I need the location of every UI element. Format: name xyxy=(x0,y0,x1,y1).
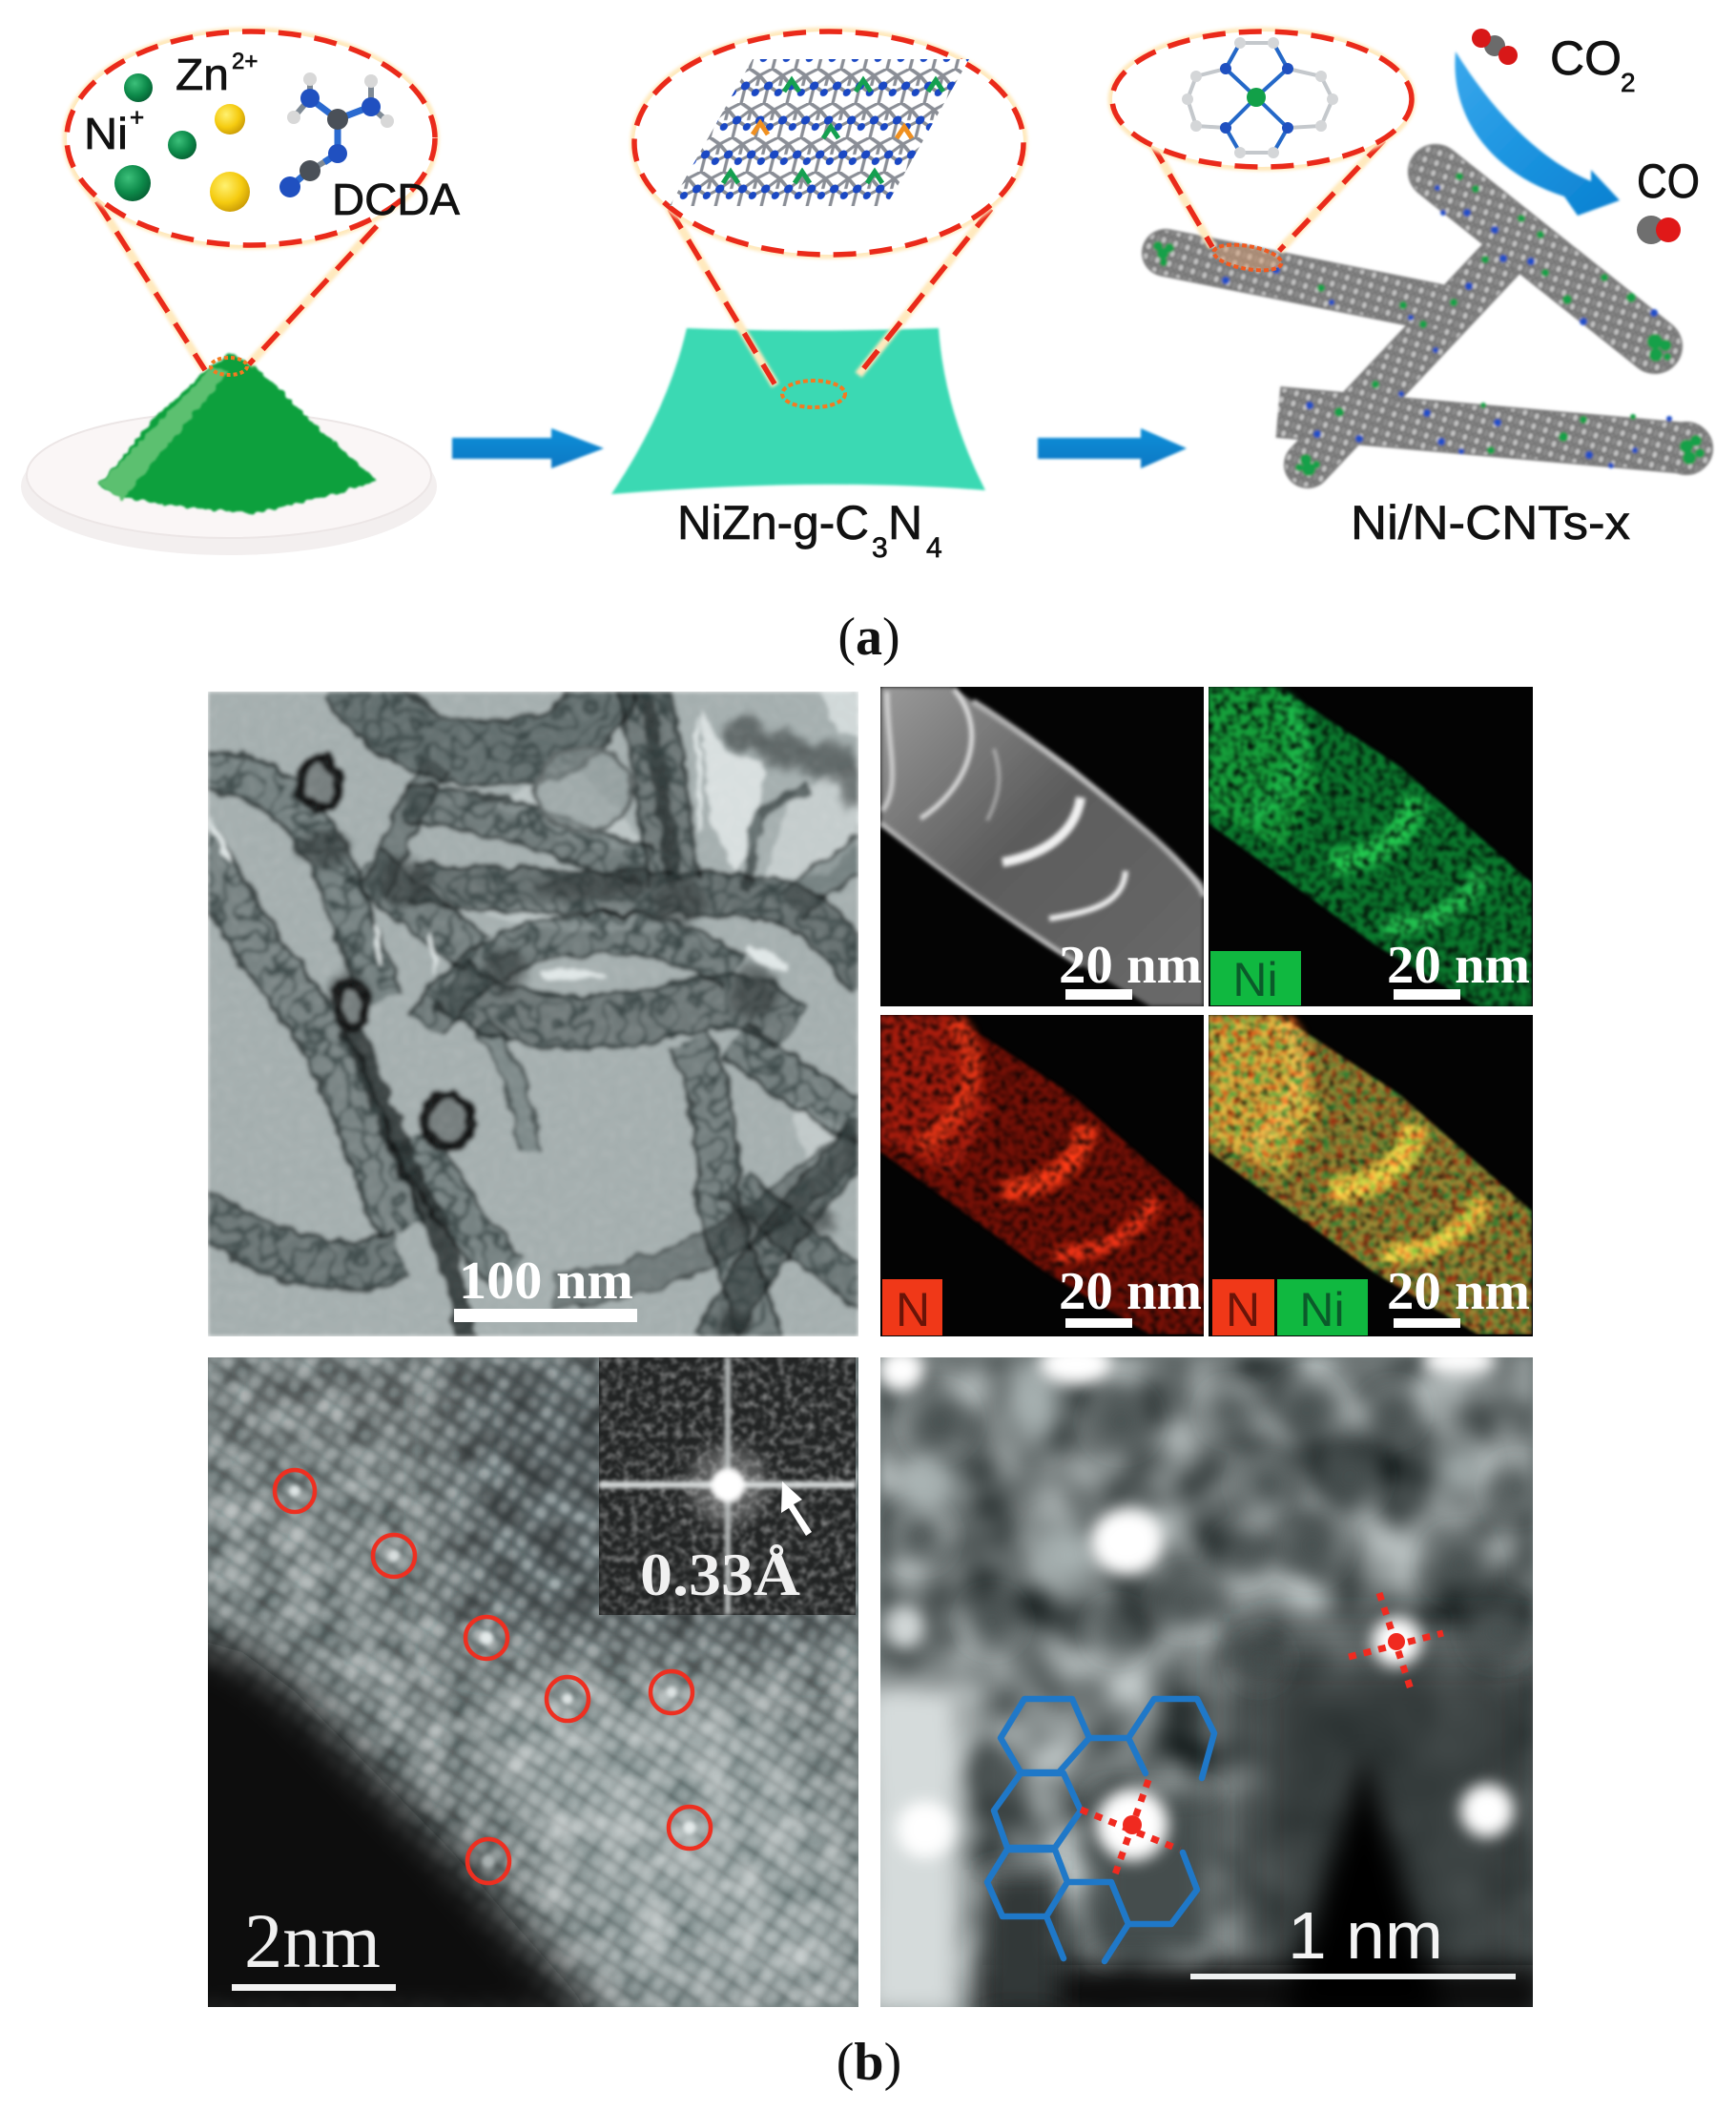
arrow: step 2 xyxy=(1038,428,1187,468)
Ni single-atom markers xyxy=(275,1470,711,1883)
label: Ni/N-CNTs-x: Ni/N-CNTs-x xyxy=(1351,496,1630,549)
carbon nanotubes xyxy=(1153,172,1712,476)
scale label: 1 nm: 1 nm xyxy=(1288,1898,1443,1973)
label: NiZn-g-C3N4: N xyxy=(888,496,922,549)
EDS panel: N map xyxy=(880,1015,1204,1336)
scale label: 1 nm xyxy=(1190,1898,1516,1979)
lattice holes xyxy=(898,1385,1538,1679)
CO molecule xyxy=(1637,216,1681,244)
EDS panel: merged map xyxy=(1209,1015,1533,1336)
HAADF-STEM image xyxy=(153,1357,858,2032)
tag: N xyxy=(882,1279,942,1336)
bright Ni atoms xyxy=(878,1343,1514,1861)
Ni-N4 dotted marker xyxy=(1349,1593,1443,1689)
label: CO2: 2 xyxy=(1621,68,1636,97)
dark clusters xyxy=(300,715,869,1337)
Ni-N4 dotted marker xyxy=(1081,1780,1180,1874)
arrow: FFT spot xyxy=(781,1481,812,1536)
EDS panel: Ni map xyxy=(1209,687,1533,1006)
scale label: 100 nm xyxy=(454,1263,637,1322)
label: Ni+: + xyxy=(130,103,144,132)
arrow: step 1 xyxy=(452,428,604,468)
panel a: synthesis schematic xyxy=(21,29,1712,564)
label: CO2 xyxy=(1550,31,1636,97)
label: DCDA: DCDA xyxy=(332,175,460,224)
curved arrow: CO2 to CO xyxy=(1455,52,1620,216)
label: 0.33 Angstrom: 0.33Å xyxy=(640,1541,800,1608)
tag: N: N xyxy=(896,1283,930,1336)
label: Zn2+ xyxy=(176,49,258,99)
ions: Ni and Zn spheres xyxy=(114,73,250,212)
tag: N xyxy=(1212,1279,1274,1336)
lighter patches xyxy=(901,1362,1478,1583)
scale label: 2nm: 2nm xyxy=(244,1897,381,1984)
cell walls inside tubes xyxy=(196,679,868,1350)
panel b: microscopy images xyxy=(153,668,1545,2032)
caption: (a): (a) xyxy=(837,608,900,667)
label: NiZn-g-C3N4: 4 xyxy=(926,532,942,564)
label: Zn2+: 2+ xyxy=(232,49,258,74)
atomic-resolution HAADF image xyxy=(863,1343,1545,2022)
label: Ni+: Ni xyxy=(84,109,128,158)
g-C3N4 lattice xyxy=(670,59,969,206)
FFT inset xyxy=(599,1357,856,1615)
label: CO2: CO xyxy=(1550,31,1622,85)
label: CO: CO xyxy=(1637,155,1700,208)
scale label: 20 nm: 20 nm xyxy=(1387,936,1530,995)
tag: Ni: Ni xyxy=(1299,1283,1345,1336)
label: NiZn-g-C3N4: NiZn-g-C xyxy=(677,496,869,549)
magnified ellipse: lattice xyxy=(634,31,1023,407)
hexagon overlay xyxy=(987,1699,1214,1961)
magnified ellipse: Ni-N4 site xyxy=(1112,31,1412,275)
label: Ni+ xyxy=(84,103,144,158)
scale label: 20 nm: 20 nm xyxy=(1387,1262,1530,1321)
Ni-N4 molecule xyxy=(1182,37,1338,158)
label: Zn2+: Zn xyxy=(176,50,229,99)
TEM image xyxy=(208,692,858,1336)
powder on dish xyxy=(21,353,437,555)
scale label: 20 nm: 20 nm xyxy=(1059,1262,1202,1321)
magnified ellipse: precursors xyxy=(67,31,435,375)
tag: Ni: Ni xyxy=(1232,953,1278,1006)
bright slits xyxy=(208,715,792,980)
tag: Ni xyxy=(1277,1279,1368,1336)
dark catalyst particles xyxy=(300,759,472,1147)
scale label: 20 nm: 20 nm xyxy=(1059,936,1202,995)
nanotubes xyxy=(353,679,610,754)
label: NiZn-g-C3N4: 3 xyxy=(872,532,888,564)
label: NiZn-g-C3N4 xyxy=(677,496,942,564)
DCDA molecule xyxy=(279,72,394,197)
CO2 molecule xyxy=(1472,29,1518,65)
EDS panel: dark-field image xyxy=(880,687,1204,1006)
green sheet: NiZn-g-C3N4 xyxy=(611,328,985,494)
tag: Ni xyxy=(1210,951,1301,1006)
scale label: 100 nm: 100 nm xyxy=(459,1252,633,1311)
caption: (b): (b) xyxy=(837,2033,901,2092)
tag: N: N xyxy=(1226,1283,1260,1336)
